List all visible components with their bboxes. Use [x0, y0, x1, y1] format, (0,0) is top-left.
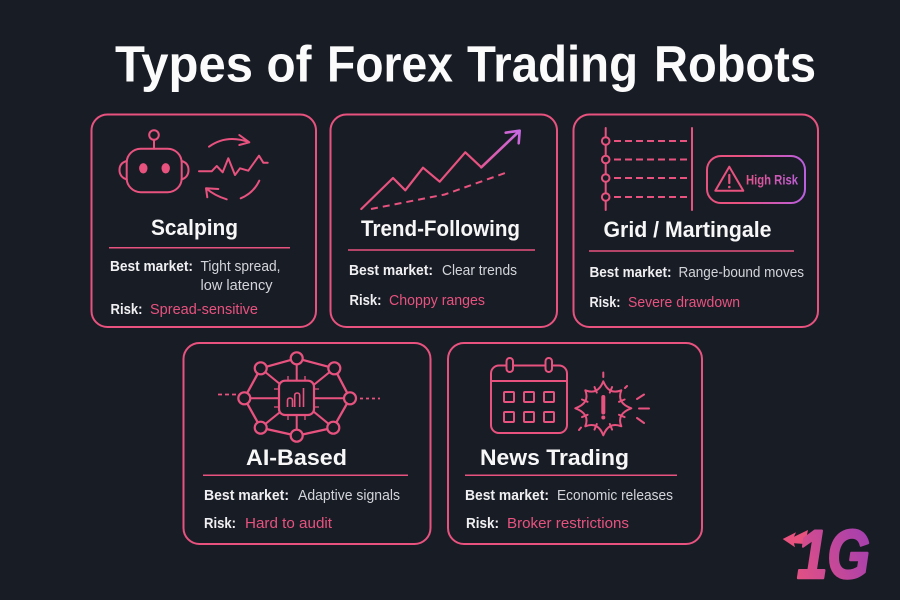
best market — [110, 259, 280, 294]
best market: Best market: — [349, 263, 433, 279]
panel: Grid / Martingale — [574, 114, 818, 327]
title: Robots — [654, 36, 816, 93]
icon: price pulse with cycle arrows — [199, 135, 268, 199]
best market — [349, 263, 517, 279]
heading: Trend-Following — [361, 216, 520, 241]
icon: rising trend arrow — [361, 131, 520, 209]
panel: AI-Based — [184, 343, 430, 544]
best market — [465, 488, 673, 504]
risk — [350, 293, 485, 309]
best market: Best market: — [465, 488, 549, 504]
risk: Risk: — [590, 295, 620, 311]
title: Types — [115, 36, 253, 93]
risk: Hard to audit — [245, 516, 332, 532]
best market: Economic releases — [557, 488, 673, 504]
icon: neural chip network — [218, 352, 380, 442]
risk: Severe drawdown — [628, 295, 740, 311]
risk: Risk: — [350, 293, 382, 309]
risk — [204, 516, 332, 532]
card frame — [448, 343, 702, 544]
card frame — [184, 343, 430, 544]
risk: Spread-sensitive — [150, 302, 258, 318]
best market: Range-bound moves — [678, 265, 804, 281]
heading: Grid / Martingale — [604, 217, 772, 242]
title: Trading — [467, 36, 638, 93]
heading: News Trading — [480, 445, 629, 470]
card frame — [92, 114, 316, 327]
risk: Risk: — [466, 516, 499, 532]
best market: Tight spread, — [200, 259, 280, 275]
heading: Scalping — [151, 215, 238, 240]
risk: Risk: — [110, 302, 142, 318]
best market — [204, 488, 400, 504]
best market: Best market: — [110, 259, 193, 275]
title: of — [266, 36, 312, 93]
icon: calendar — [491, 358, 567, 433]
panel: Trend-Following — [330, 114, 557, 327]
card frame — [574, 114, 818, 327]
best market — [590, 265, 804, 281]
risk: Choppy ranges — [389, 293, 485, 309]
best market: Adaptive signals — [298, 488, 400, 504]
best market: Best market: — [590, 265, 672, 281]
title: Forex — [327, 36, 453, 93]
best market: low latency — [200, 278, 273, 294]
badge: high risk — [707, 156, 805, 203]
logo: 1G — [783, 516, 870, 593]
card frame — [330, 114, 557, 327]
risk: Risk: — [204, 516, 236, 532]
badge: high risk: High Risk — [746, 172, 798, 188]
panel: Scalping — [92, 114, 316, 327]
best market: Best market: — [204, 488, 289, 504]
risk: Broker restrictions — [507, 516, 629, 532]
title — [115, 36, 816, 93]
heading: AI-Based — [246, 445, 347, 470]
best market: Clear trends — [442, 263, 517, 279]
panel: News Trading — [448, 343, 702, 544]
icon: grid levels — [602, 128, 692, 210]
icon: robot — [120, 130, 188, 192]
icon: news alert burst — [575, 372, 649, 435]
logo: 1G: 1G — [797, 516, 870, 593]
